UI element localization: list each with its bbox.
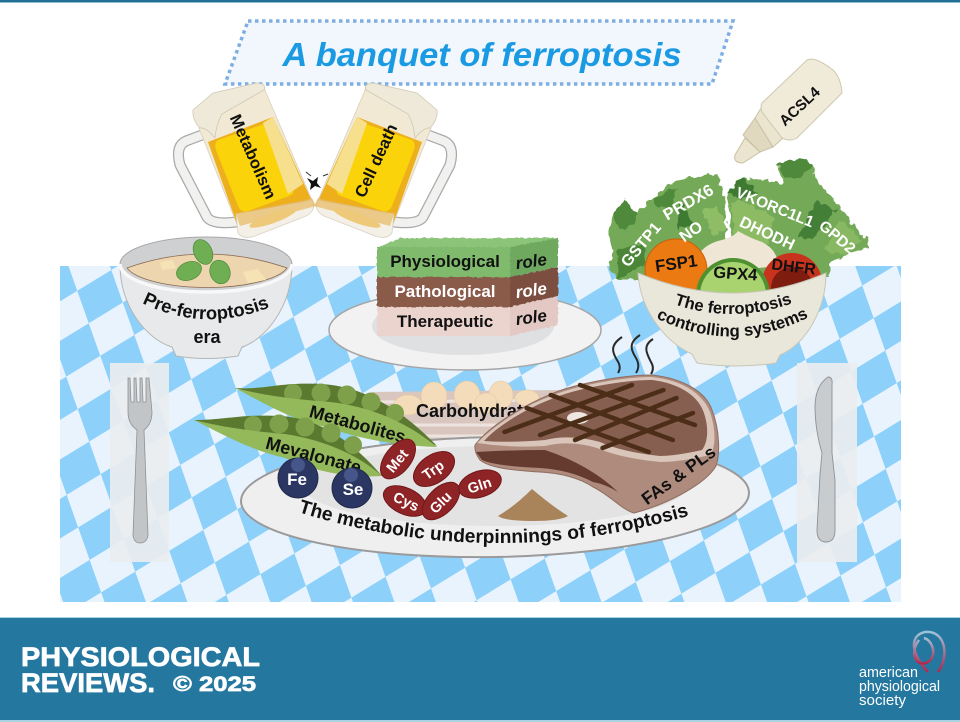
salad bowl: ferroptosis controlling systems bbox=[608, 158, 869, 366]
salad bowl: ferroptosis controlling systems: VKORC1L1 bbox=[733, 184, 817, 231]
pea pod: Metabolites: Metabolites bbox=[307, 401, 408, 447]
center plate with layered cake: Physiological bbox=[390, 252, 500, 271]
title banner bbox=[225, 21, 733, 84]
beans: amino acids: Trp bbox=[420, 458, 448, 484]
blueberry: Se: Se bbox=[343, 480, 363, 499]
tomato slice bbox=[762, 253, 822, 313]
icon: fork bbox=[128, 378, 152, 543]
pea pod: Mevalonate: Mevalonate bbox=[264, 433, 363, 478]
icon: clink spark bbox=[306, 172, 328, 190]
soup bowl: Pre-ferroptosis era: era bbox=[193, 327, 222, 347]
spice powder bbox=[498, 489, 568, 521]
center plate with layered cake: Therapeutic bbox=[397, 312, 493, 331]
salad bowl: ferroptosis controlling systems: GPX4 bbox=[713, 263, 759, 285]
text: Carbohydrates: Carbohydrates bbox=[416, 401, 543, 421]
beans: amino acids: Glu bbox=[427, 489, 455, 517]
pea pod: Metabolites bbox=[235, 384, 437, 447]
beans: amino acids: Met bbox=[384, 447, 412, 476]
title banner: A banquet of ferroptosis bbox=[281, 37, 682, 74]
center plate with layered cake: role bbox=[514, 250, 548, 273]
center plate with layered cake: role bbox=[514, 306, 548, 329]
dropper bottle: ACSL4 bbox=[735, 59, 842, 163]
icon: knife bbox=[815, 377, 835, 542]
soup bowl: Pre-ferroptosis era: Pre-ferroptosis bbox=[143, 292, 268, 323]
napkin and knife bbox=[797, 363, 857, 562]
journal name bbox=[21, 642, 260, 698]
salad bowl: ferroptosis controlling systems: GPD2 bbox=[815, 217, 859, 258]
icon: mint leaves bbox=[174, 236, 234, 287]
center plate with layered cake bbox=[329, 238, 601, 370]
society logo: society bbox=[859, 692, 907, 709]
blueberry: Fe bbox=[278, 458, 318, 498]
tablecloth bbox=[60, 266, 901, 602]
journal name: REVIEWS. bbox=[21, 668, 155, 698]
dropper bottle: ACSL4: ACSL4 bbox=[776, 83, 824, 130]
steak: FAs & PLs bbox=[638, 441, 720, 509]
salad bowl: ferroptosis controlling systems: DHFR bbox=[770, 256, 817, 279]
orange slice bbox=[645, 239, 707, 301]
carbohydrate dish bbox=[372, 381, 560, 445]
pea pod: Mevalonate bbox=[194, 414, 382, 478]
center plate with layered cake: role bbox=[514, 279, 548, 302]
lettuce bbox=[608, 158, 868, 280]
beans: amino acids: Cys bbox=[390, 490, 421, 515]
beer mug: Cell death bbox=[314, 83, 452, 237]
blueberry: Se bbox=[332, 468, 372, 508]
society logo: physiological bbox=[859, 678, 940, 695]
steam bbox=[613, 335, 653, 374]
journal name: © 2025 bbox=[173, 673, 256, 696]
salad bowl: ferroptosis controlling systems: GSTP1 bbox=[618, 219, 665, 271]
napkin and fork bbox=[110, 363, 169, 562]
salad bowl: ferroptosis controlling systems: FSP1 bbox=[654, 251, 699, 276]
journal name: PHYSIOLOGICAL bbox=[21, 642, 260, 672]
soup bowl: Pre-ferroptosis era bbox=[118, 236, 294, 359]
salad bowl: ferroptosis controlling systems: controlling systems bbox=[658, 310, 808, 340]
beer mug: Cell death: Cell death bbox=[352, 121, 401, 200]
plate caption: The metabolic underpinnings of ferroptosis bbox=[301, 499, 688, 547]
steak bbox=[475, 375, 720, 513]
salad bowl: ferroptosis controlling systems: PRDX6 bbox=[660, 181, 717, 224]
footer band bbox=[0, 617, 960, 722]
salad bowl: ferroptosis controlling systems: NO bbox=[677, 218, 706, 246]
layered cake bbox=[377, 238, 558, 336]
blueberry: Fe: Fe bbox=[287, 470, 307, 489]
mayonnaise bbox=[694, 231, 778, 274]
top border bbox=[0, 0, 960, 2]
beans: amino acids bbox=[374, 433, 505, 526]
society logo bbox=[859, 632, 944, 709]
cucumber slice bbox=[696, 258, 770, 332]
salad bowl: ferroptosis controlling systems: DHODH bbox=[737, 214, 797, 254]
bottom plate: metabolic underpinnings bbox=[240, 433, 750, 561]
center plate with layered cake: Pathological bbox=[394, 282, 496, 301]
society logo: american bbox=[859, 664, 918, 681]
beans: amino acids: Gln bbox=[466, 475, 494, 498]
beer mug: Metabolism: Metabolism bbox=[226, 112, 279, 202]
beer mug: Metabolism bbox=[178, 83, 316, 237]
salad bowl: ferroptosis controlling systems: The ferroptosis bbox=[677, 293, 792, 317]
